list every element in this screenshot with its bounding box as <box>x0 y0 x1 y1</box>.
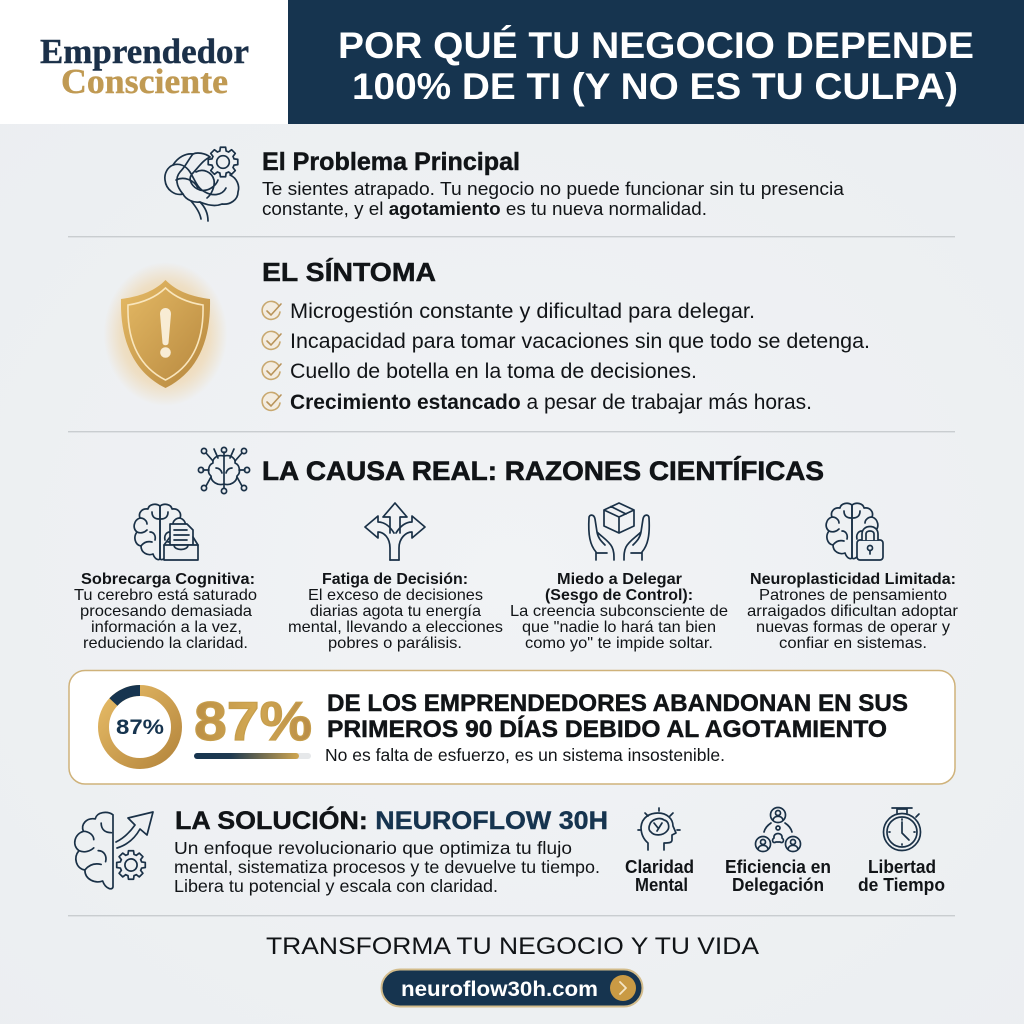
description: Tu cerebro está saturado <box>74 587 257 604</box>
benefit: claridad mental: Mental <box>635 875 688 895</box>
section: problema principal <box>165 147 845 221</box>
description <box>747 571 959 652</box>
column: neuroplasticidad limitada <box>747 503 959 652</box>
description: confiar en sistemas. <box>779 635 927 652</box>
heading: LA CAUSA REAL: RAZONES CIENTÍFICAS <box>262 455 824 486</box>
text block: mental, sistematiza procesos y te devuelve tu tiempo. <box>174 857 600 877</box>
description: mental, llevando a elecciones <box>288 619 503 636</box>
logo panel <box>0 0 288 124</box>
callout note: No es falta de esfuerzo, es un sistema insostenible. <box>325 745 725 765</box>
icon: head with glowing brain <box>638 808 680 850</box>
benefit: libertad de tiempo <box>858 808 945 895</box>
header <box>0 0 1024 124</box>
description: reduciendo la claridad. <box>83 635 248 652</box>
website button: neuroflow30h.com <box>401 978 598 1001</box>
callout headline <box>327 690 908 743</box>
icon: stopwatch <box>884 808 920 850</box>
call to action heading: TRANSFORMA TU NEGOCIO Y TU VIDA <box>266 933 759 960</box>
website button <box>382 970 642 1006</box>
description <box>74 571 257 652</box>
description: diarias agota tu energía <box>310 603 481 620</box>
column: fatiga de decision <box>288 503 503 652</box>
icon: brain and inbox <box>134 504 198 560</box>
callout headline: DE LOS EMPRENDEDORES ABANDONAN EN SUS <box>327 690 908 717</box>
section: el sintoma <box>104 257 870 414</box>
section: la solucion <box>75 805 945 896</box>
item 1: Microgestión constante y dificultad para delegar. <box>290 300 755 323</box>
column: sobrecarga cognitiva <box>74 504 257 652</box>
description: arraigados dificultan adoptar <box>747 603 959 620</box>
text block: Libera tu potencial y escala con claridad. <box>174 876 498 896</box>
icon: delegation network <box>756 808 800 852</box>
title banner: POR QUÉ TU NEGOCIO DEPENDE <box>338 25 974 66</box>
heading: El Problema Principal <box>262 148 520 176</box>
footer <box>266 933 759 1006</box>
icon: diverging arrows <box>365 503 425 560</box>
description: como yo" te impide soltar. <box>525 635 713 652</box>
heading: LA SOLUCIÓN: NEUROFLOW 30H <box>175 805 608 835</box>
callout: 87% statistic <box>69 670 955 784</box>
checklist <box>262 300 870 414</box>
logo panel: Consciente <box>61 62 228 101</box>
description: (Sesgo de Control): <box>545 587 693 604</box>
title banner: 100% DE TI (Y NO ES TU CULPA) <box>352 66 958 107</box>
text block <box>174 838 600 896</box>
description: procesando demasiada <box>80 603 252 620</box>
description: El exceso de decisiones <box>308 587 483 604</box>
benefit: eficiencia en delegacion: Eficiencia en <box>725 857 831 877</box>
description: Miedo a Delegar <box>557 571 682 588</box>
logo panel: Emprendedor <box>40 32 249 71</box>
benefit: claridad mental <box>625 808 694 895</box>
benefit: claridad mental: Claridad <box>625 857 694 877</box>
description <box>288 571 503 652</box>
description: que "nadie lo hará tan bien <box>522 619 716 636</box>
callout headline: PRIMEROS 90 DÍAS DEBIDO AL AGOTAMIENTO <box>327 715 887 743</box>
icon: warning shield <box>104 262 228 406</box>
icon: brain with gear <box>165 147 239 221</box>
heading: EL SÍNTOMA <box>262 257 436 287</box>
big number: 87% <box>194 690 312 752</box>
benefit: libertad de tiempo: Libertad <box>868 857 936 877</box>
benefit: libertad de tiempo: de Tiempo <box>858 875 945 895</box>
icon: hands holding a box <box>589 503 649 560</box>
section: la causa real <box>74 447 959 652</box>
description: Neuroplasticidad Limitada: <box>750 571 956 588</box>
text block: constante, y el agotamiento es tu nueva normalidad. <box>262 198 707 219</box>
description: La creencia subconsciente de <box>510 603 728 620</box>
item 4: Crecimiento estancado a pesar de trabajar más horas. <box>290 391 812 414</box>
icon: brain with padlock <box>826 503 883 560</box>
description: Patrones de pensamiento <box>759 587 947 604</box>
benefit: eficiencia en delegacion: Delegación <box>732 875 824 895</box>
icon: brain, growth arrow and gear <box>75 812 153 889</box>
benefit: eficiencia en delegacion <box>725 808 831 895</box>
description: pobres o parálisis. <box>328 635 462 652</box>
description: nuevas formas de operar y <box>756 619 950 636</box>
donut chart <box>104 690 176 764</box>
description: información a la vez, <box>91 619 242 636</box>
title banner <box>288 0 1024 124</box>
text block <box>262 178 845 219</box>
description: Sobrecarga Cognitiva: <box>81 571 255 588</box>
text block: Te sientes atrapado. Tu negocio no puede funcionar sin tu presencia <box>262 178 845 199</box>
item 3: Cuello de botella en la toma de decisiones. <box>290 360 697 383</box>
column: miedo a delegar <box>510 503 728 652</box>
item 2: Incapacidad para tomar vacaciones sin que todo se detenga. <box>290 330 870 353</box>
donut chart: 87% <box>116 716 164 739</box>
progress bar <box>194 753 311 759</box>
description: Fatiga de Decisión: <box>322 571 468 588</box>
icon: neural network brain <box>198 447 250 494</box>
text block: Un enfoque revolucionario que optimiza tu flujo <box>174 838 572 858</box>
description <box>510 571 728 652</box>
